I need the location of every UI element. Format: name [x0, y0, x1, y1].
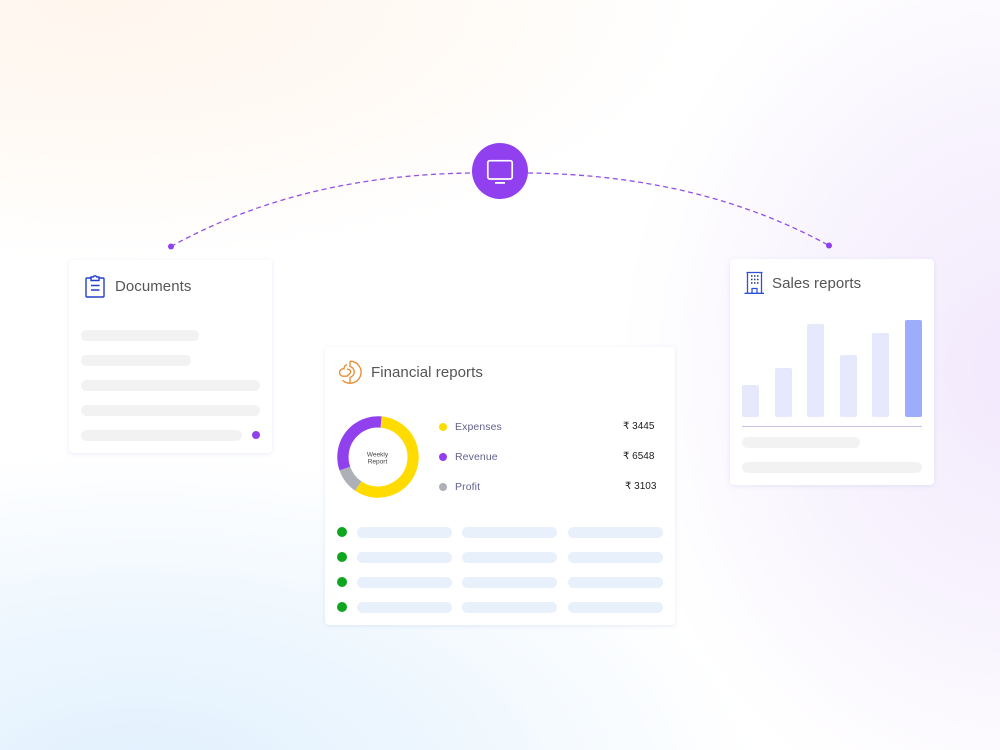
financial table rows — [337, 527, 663, 613]
heading: documents: Documents — [115, 278, 191, 295]
icon: clipboard — [85, 275, 105, 298]
donut chart: weekly report — [337, 416, 419, 498]
donut chart: weekly report: Weekly — [367, 451, 389, 458]
legend: expenses: Expenses — [455, 421, 502, 433]
legend: profit: Profit — [455, 481, 480, 493]
legend: expenses — [439, 421, 654, 433]
panel: financial reports — [325, 347, 675, 625]
panel: documents — [69, 260, 272, 453]
icon: monitor hub — [472, 143, 528, 199]
legend: revenue: Revenue — [455, 451, 498, 463]
legend: revenue: ₹ 6548 — [623, 451, 654, 462]
documents placeholder rows — [81, 330, 260, 441]
legend: profit: ₹ 3103 — [625, 481, 656, 492]
donut chart: weekly report: Report — [368, 458, 387, 465]
heading: sales reports: Sales reports — [772, 275, 861, 292]
icon: orange pie chart — [339, 360, 362, 384]
legend: expenses: ₹ 3445 — [623, 421, 654, 432]
sales placeholder rows — [742, 437, 922, 473]
bar chart: sales — [742, 320, 922, 427]
heading: financial reports: Financial reports — [371, 364, 483, 381]
legend: revenue — [439, 451, 654, 463]
icon: office building — [744, 272, 764, 294]
legend: profit — [439, 481, 656, 493]
documents status dot — [252, 431, 260, 439]
panel: sales reports — [730, 259, 934, 485]
